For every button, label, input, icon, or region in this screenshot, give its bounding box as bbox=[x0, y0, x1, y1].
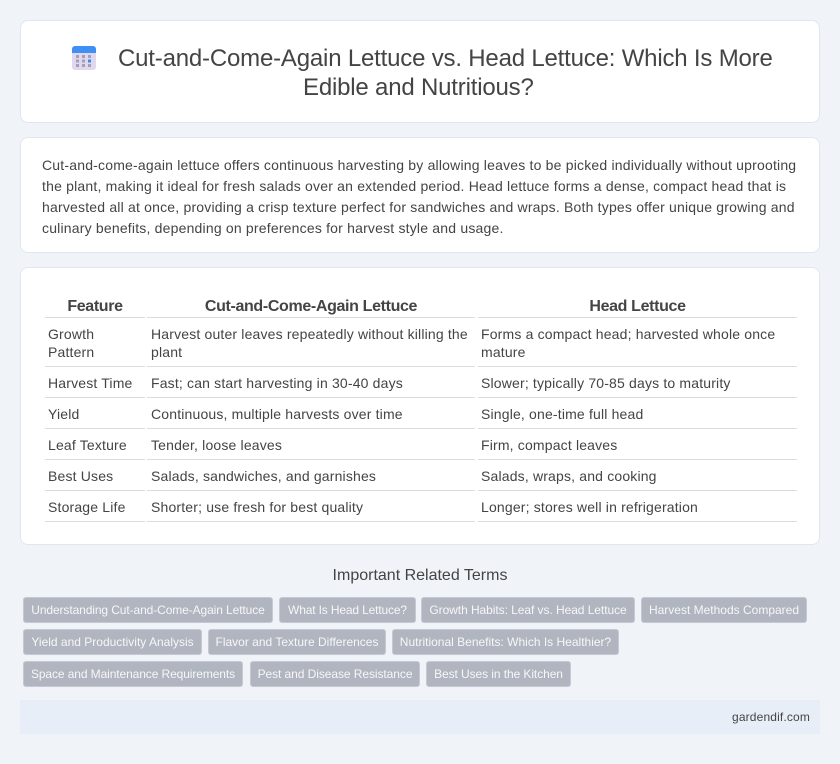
row: growth pattern: plant bbox=[151, 344, 182, 360]
row: growth pattern: Harvest outer leaves repeatedly without killing the bbox=[151, 326, 468, 342]
row: yield: Single, one-time full head bbox=[481, 406, 643, 422]
intro text bbox=[42, 157, 796, 236]
table header bbox=[45, 298, 797, 318]
row: leaf texture: Firm, compact leaves bbox=[481, 437, 617, 453]
intro text: harvested all at once, providing a crisp texture perfect for sandwiches and wraps. Both types offer unique growing and bbox=[42, 199, 795, 215]
row: best uses: Salads, sandwiches, and garnishes bbox=[151, 468, 376, 484]
intro panel bbox=[20, 137, 820, 253]
intro text: the plant, making it ideal for fresh salads over an extended period. Head lettuce forms a dense, compact head that is bbox=[42, 178, 786, 194]
icon: calendar bbox=[72, 46, 96, 70]
row: harvest time: Harvest Time bbox=[48, 375, 133, 391]
tag: Harvest Methods Compared bbox=[649, 603, 799, 617]
tag: Flavor and Texture Differences bbox=[216, 635, 378, 649]
row: yield: Continuous, multiple harvests over time bbox=[151, 406, 403, 422]
row: harvest time: Fast; can start harvesting in 30-40 days bbox=[151, 375, 403, 391]
related terms tags bbox=[23, 597, 807, 687]
table header: Cut-and-Come-Again Lettuce bbox=[205, 298, 417, 315]
tag bbox=[23, 661, 243, 687]
row: harvest time: Slower; typically 70-85 days to maturity bbox=[481, 375, 731, 391]
footer credit: gardendif.com bbox=[732, 710, 810, 724]
tag bbox=[250, 661, 420, 687]
table header: Head Lettuce bbox=[589, 298, 686, 315]
tag: Yield and Productivity Analysis bbox=[31, 635, 194, 649]
comparison table panel bbox=[20, 267, 820, 545]
table header: Feature bbox=[67, 298, 123, 315]
row: growth pattern bbox=[45, 326, 797, 367]
title bbox=[118, 45, 773, 101]
row: growth pattern: mature bbox=[481, 344, 526, 360]
tag bbox=[426, 661, 571, 687]
tag bbox=[279, 597, 416, 623]
title panel bbox=[20, 20, 820, 123]
related terms heading: Important Related Terms bbox=[333, 567, 507, 584]
row: yield: Yield bbox=[48, 406, 79, 422]
tag bbox=[392, 629, 619, 655]
tag: Space and Maintenance Requirements bbox=[31, 667, 235, 681]
intro text: Cut-and-come-again lettuce offers continuous harvesting by allowing leaves to be picked individually without uprooting bbox=[42, 157, 796, 173]
row: leaf texture: Tender, loose leaves bbox=[151, 437, 282, 453]
tag bbox=[23, 597, 273, 623]
row: best uses bbox=[45, 468, 797, 491]
row: leaf texture: Leaf Texture bbox=[48, 437, 127, 453]
tag: Best Uses in the Kitchen bbox=[434, 667, 563, 681]
title: Edible and Nutritious? bbox=[303, 74, 534, 101]
row: growth pattern: Forms a compact head; harvested whole once bbox=[481, 326, 775, 342]
row: storage life bbox=[45, 499, 797, 522]
title: Cut-and-Come-Again Lettuce vs. Head Lettuce: Which Is More bbox=[118, 45, 773, 72]
row: best uses: Best Uses bbox=[48, 468, 113, 484]
tag bbox=[208, 629, 386, 655]
tag bbox=[23, 629, 202, 655]
tag bbox=[421, 597, 635, 623]
row: storage life: Shorter; use fresh for best quality bbox=[151, 499, 363, 515]
row: best uses: Salads, wraps, and cooking bbox=[481, 468, 657, 484]
tag: Understanding Cut-and-Come-Again Lettuce bbox=[31, 603, 265, 617]
row: harvest time bbox=[45, 375, 797, 398]
intro text: culinary benefits, depending on preferences for harvest style and usage. bbox=[42, 220, 504, 236]
row: growth pattern: Pattern bbox=[48, 344, 94, 360]
tag bbox=[641, 597, 807, 623]
tag: Growth Habits: Leaf vs. Head Lettuce bbox=[429, 603, 627, 617]
tag: Pest and Disease Resistance bbox=[258, 667, 412, 681]
footer bar bbox=[20, 700, 820, 734]
row: storage life: Storage Life bbox=[48, 499, 126, 515]
tag: What Is Head Lettuce? bbox=[288, 603, 407, 617]
row: leaf texture bbox=[45, 437, 797, 460]
row: yield bbox=[45, 406, 797, 429]
row: growth pattern: Growth bbox=[48, 326, 94, 342]
tag: Nutritional Benefits: Which Is Healthier? bbox=[400, 635, 611, 649]
row: storage life: Longer; stores well in refrigeration bbox=[481, 499, 698, 515]
